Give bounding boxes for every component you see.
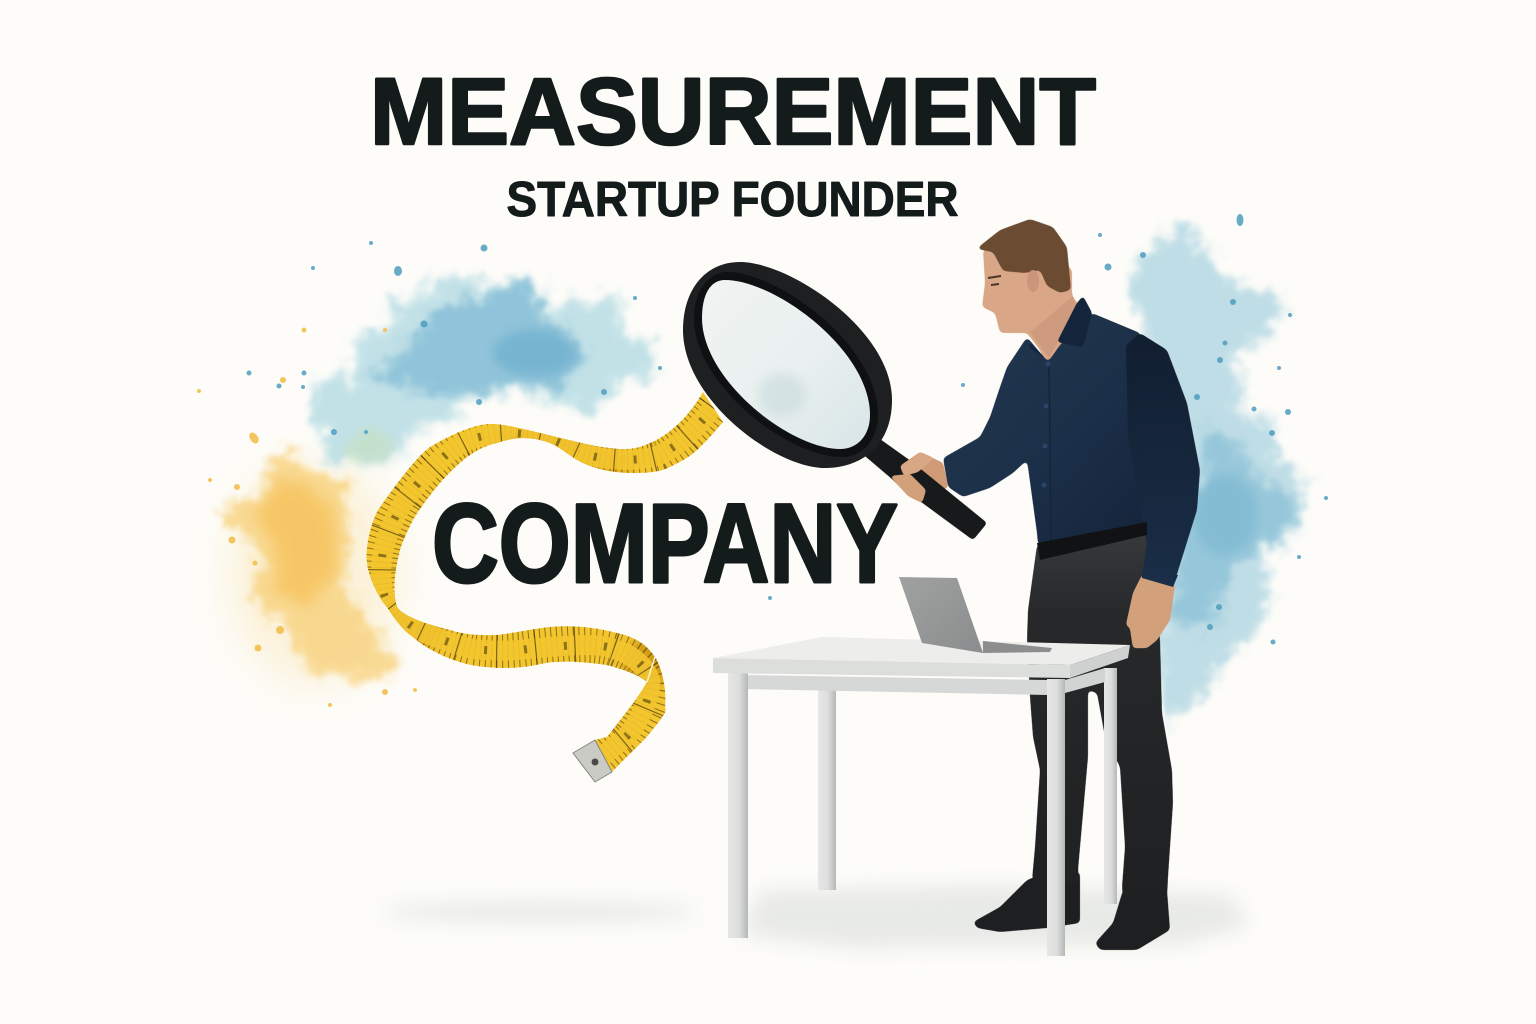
right shoe [1095,890,1170,950]
rim [683,262,892,468]
eye and brow [988,276,1001,285]
left hand [890,452,948,503]
back right leg [1104,668,1117,904]
right sleeve [1126,333,1200,587]
side apron [1065,668,1105,693]
right cuff [1142,570,1178,587]
table side edge [1070,645,1130,678]
inner bevel [694,272,878,457]
back left leg [818,688,836,890]
lens [702,280,870,449]
desk [713,637,1130,956]
measuring tape [367,392,723,782]
title: MEASUREMENT [370,59,1096,165]
paint speckles [197,214,1328,707]
thumb [900,452,934,476]
tape metal tip [573,740,612,782]
button placket [1042,362,1051,540]
hair [976,219,1071,293]
belt [1037,522,1147,560]
front left leg [728,673,748,938]
collar [1027,296,1092,362]
front apron [745,675,1047,695]
magnifying glass [683,262,987,540]
neck and face [982,235,1080,375]
founder [943,219,1200,950]
ear [1027,270,1039,292]
fingers [890,474,926,503]
watercolor splash: blue right [1128,225,1305,725]
laptop [899,577,1052,653]
table top surface [713,637,1130,665]
lens reflection [758,373,806,417]
right hand [1126,575,1175,648]
floor shadows [380,885,1250,948]
left shoe [973,872,1080,932]
table front edge [713,658,1070,678]
shirt torso and left arm [943,313,1165,545]
watercolor splash: yellow left [220,447,400,685]
front right leg [1047,679,1065,956]
handle [858,432,987,540]
subtitle: STARTUP FOUNDER [506,173,958,227]
watercolor splash: blue left [307,273,655,465]
illustration canvas [197,76,1328,956]
trousers [1027,520,1173,898]
company word: COMPANY [432,481,898,606]
